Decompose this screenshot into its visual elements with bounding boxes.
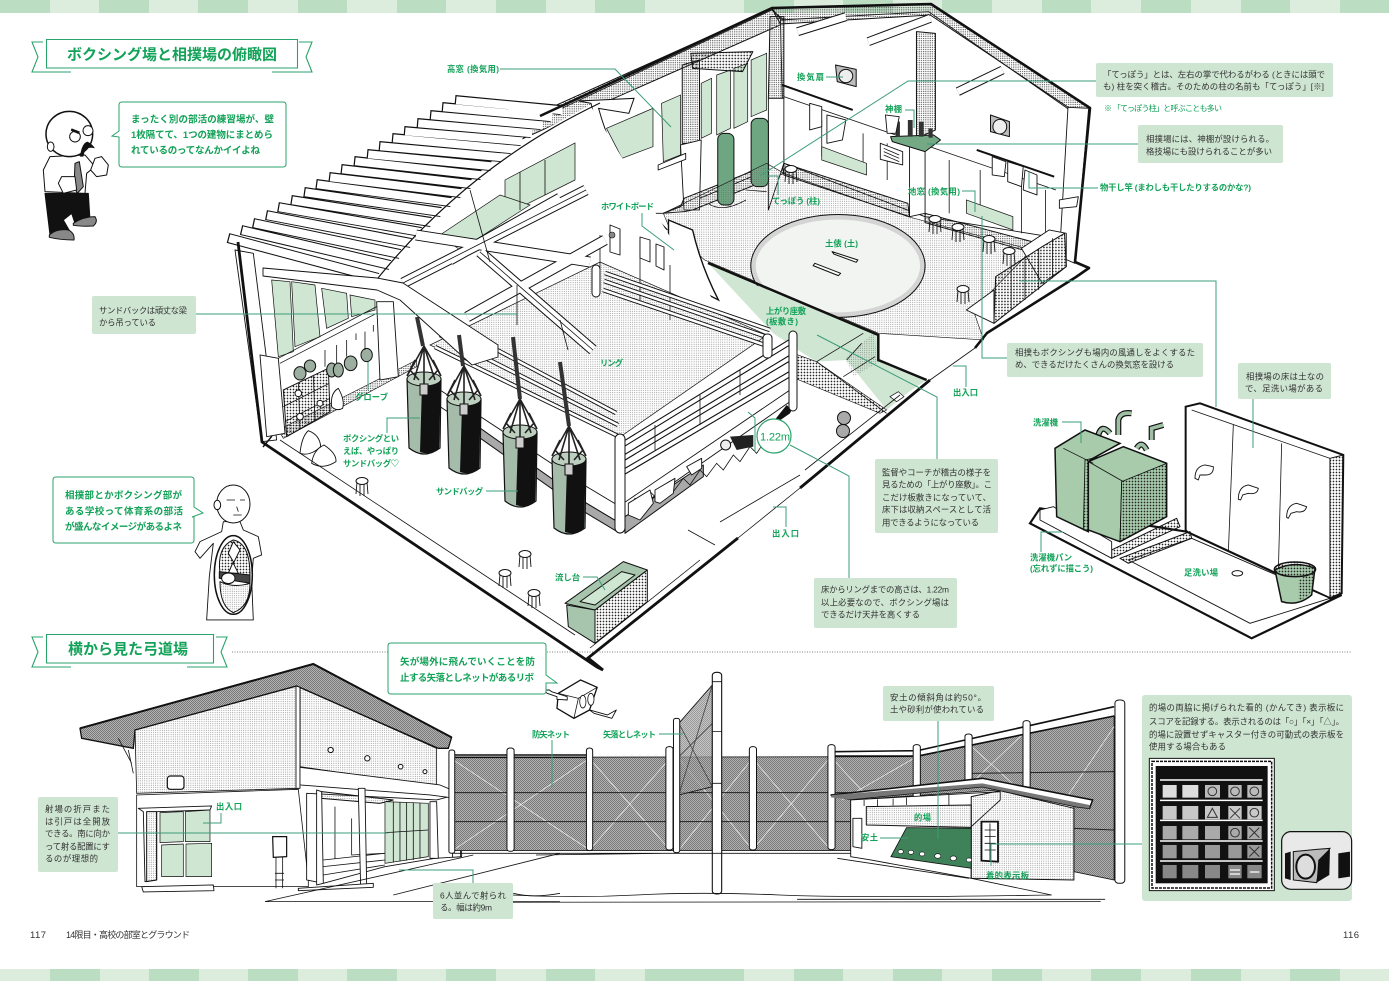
illustration: sumo room [508, 4, 1090, 340]
ring front ropes [622, 342, 790, 473]
top colour band [0, 0, 1389, 13]
safety drop net [673, 672, 722, 894]
speech bubble: torso: 相撲部とかボクシング部が [65, 490, 182, 502]
note: azuchi: 安土の傾斜角は約50°。 [890, 692, 986, 702]
note: shooting hall doors: 射場の折戸また [45, 804, 110, 814]
arrow net fence and posts [440, 672, 1125, 902]
green labels: 足洗い場 [1184, 568, 1219, 578]
green labels: グローブ [355, 392, 389, 402]
sports bags [300, 388, 343, 466]
title: bird's-eye section heading: ボクシング場と相撲場の俯瞰図 [67, 46, 277, 64]
note: ring height: 床からリングまでの高さは、1.22m [821, 584, 949, 594]
illustration: pergola roof slats [228, 100, 600, 278]
ring apron [440, 390, 792, 533]
note: ventilation: 相撲もボクシングも場内の風通しをよくするた [1015, 348, 1195, 358]
posts [449, 700, 1125, 883]
speech bubble: robot: 止する矢落としネットがあるリボ [400, 672, 534, 684]
ring corner posts [592, 265, 797, 533]
note: kamidana [1138, 125, 1283, 163]
panel: scoreboard note: スコアを記録する。表示されるのは「○」「×」「△」。 [1149, 716, 1344, 726]
stools in boxing room [356, 478, 540, 608]
speech bubble: torso [53, 477, 203, 543]
lead lines [118, 69, 1253, 883]
note: raised platform: こだけ板敷きになっていて、 [882, 492, 991, 502]
green labels: 出入口 [216, 802, 242, 812]
ventilation fans [836, 65, 1009, 137]
green labels: 地窓 (換気用) [908, 186, 960, 196]
green labels: ホワイトボード [601, 202, 654, 212]
note: ring height: できるだけ天井を高くする [821, 610, 920, 620]
note: kamidana: 格技場にも設けられることが多い [1146, 146, 1272, 156]
bucket [1274, 562, 1316, 603]
footwash and washing machine illustration [1030, 403, 1343, 638]
entrance door [138, 806, 214, 892]
note: teppo: 「てっぽう」とは、左右の掌で代わるがわる (ときには頭で [1103, 70, 1325, 80]
note: foot wash: 相撲場の床は土なの [1246, 372, 1324, 382]
green labels: 神棚 [885, 104, 902, 114]
note: azuchi [883, 686, 994, 721]
note: raised platform: 用できるようになっている [882, 518, 979, 528]
rear window wall [508, 8, 784, 213]
panel: scoreboard note [1142, 695, 1352, 901]
note: teppo: も) 柱を突く稽古。そのための柱の名前も「てっぽう」[※] [1103, 82, 1324, 92]
section rule [232, 651, 1352, 653]
panel: scoreboard note: 的場に設置せずキャスター付きの可動式の表示板を [1149, 730, 1344, 740]
note: shooting hall doors: るのが理想的 [45, 854, 98, 864]
note: raised platform: 床下は収納スペースとして活 [882, 504, 992, 514]
sink [565, 562, 647, 643]
range ground lines [265, 853, 560, 902]
green labels [216, 64, 1251, 880]
washing machines [1055, 413, 1167, 542]
illustration: boxing room interior back wall [378, 105, 770, 440]
panel: scoreboard note: 的場の両脇に掲げられた看的 (かんてき) 表示板に [1149, 702, 1344, 712]
building outline walls [238, 4, 1090, 670]
green labels: 流し台 [555, 572, 581, 582]
green labels: リング [600, 358, 624, 368]
note: ring height [814, 578, 957, 628]
kyudo building [80, 664, 463, 892]
note: teppo [1096, 63, 1333, 97]
note: shooting hall doors [38, 797, 118, 872]
note: foot wash [1238, 363, 1331, 399]
height marker circle [748, 412, 791, 453]
sliding partition [966, 230, 1066, 323]
speech bubble: torso: ある学校って体育系の部活 [65, 506, 183, 518]
panel: scoreboard note: 使用する場合もある [1149, 742, 1226, 752]
speech bubble: man [112, 102, 286, 167]
green labels: てっぽう (柱) [772, 196, 820, 206]
ring rear ropes [435, 273, 770, 437]
note: width: 6人並んで射られ [440, 890, 507, 900]
kamidana shrine shelf [885, 115, 941, 152]
right end pillar [1059, 107, 1089, 263]
note: shooting hall doors: は引戸は全開放 [45, 816, 111, 826]
illustration: roof trusses [263, 190, 605, 365]
green labels: ※ 「てっぽう柱」と呼ぶことも多い [1104, 103, 1222, 113]
target building [831, 778, 1093, 895]
partition cut wedge [579, 98, 718, 300]
note: width [433, 883, 513, 919]
mailbox [273, 837, 287, 888]
torso model character [195, 485, 262, 620]
note: sandbag beam [92, 296, 196, 334]
green labels: 出入口 [772, 528, 799, 538]
footer page numbers and running head: 14限目・高校の部室とグラウンド [66, 929, 190, 940]
title: kyudo section heading: 横から見た弓道場 [68, 641, 188, 658]
wall with faucets [1186, 403, 1343, 598]
illustration: boxing ring [430, 262, 797, 533]
green labels: 洗濯機 [1033, 418, 1059, 428]
speech bubble: man: れているのってなんかイイよね [131, 146, 260, 156]
wall pillars [235, 250, 398, 442]
laundry and drying pole [782, 85, 1054, 195]
green labels: 換気扇 [797, 72, 824, 82]
green labels: 安土 [861, 832, 878, 842]
height marker circle: 1.22m [760, 432, 790, 444]
scoreboard [1149, 758, 1274, 891]
note: shooting hall doors: できる。南に向か [45, 828, 111, 838]
note: foot wash: で、足洗い場がある [1245, 384, 1323, 394]
footer page numbers and running head: 116 [1343, 930, 1359, 941]
green labels: 洗濯機パン [1030, 552, 1072, 562]
note: kamidana: 相撲場には、神棚が設けられる。 [1146, 134, 1274, 144]
note: ventilation [1007, 343, 1203, 377]
green labels: 着的表示板 [986, 870, 1030, 880]
note: ventilation: め、できるだけたくさんの換気窓を設ける [1015, 360, 1174, 370]
green labels: ボクシングとい [343, 434, 399, 444]
robot character [544, 680, 616, 718]
green labels: (忘れずに描こう) [1030, 564, 1093, 574]
dohyo ring [754, 217, 922, 315]
green labels: (板敷き) [766, 316, 798, 326]
speech bubble: man: まったく別の部活の練習場が、壁 [131, 114, 274, 126]
cubby shelf [283, 368, 330, 437]
green labels: 高窓 (換気用) [447, 64, 499, 74]
shooting hall [298, 767, 463, 891]
roof [80, 664, 452, 788]
bottom colour band [0, 969, 1389, 981]
punching pole: teppo [708, 118, 768, 208]
green labels: 上がり座敷 [766, 306, 807, 316]
raised tatami platform [708, 263, 927, 413]
wall windows [272, 280, 375, 357]
speech bubble: robot: 矢が場外に飛んでいくことを防 [400, 656, 535, 668]
title: bird's-eye section heading [32, 40, 312, 72]
note: azuchi: 土や砂利が使われている [890, 704, 984, 714]
illustration: boxing side wall [235, 250, 420, 466]
green labels: サンドバッグ [436, 486, 484, 496]
note: raised platform: 監督やコーチが稽古の様子を [882, 468, 991, 478]
footer page numbers and running head: 117 [30, 930, 46, 941]
green labels: 矢落としネット [603, 730, 656, 740]
gable back wall [768, 4, 1090, 250]
sumo floor [663, 163, 1032, 340]
title: kyudo section heading [32, 634, 227, 667]
scoreboard detail inset [1282, 832, 1352, 889]
note: ring height: 以上必要なので、ボクシング場は [821, 598, 949, 608]
speech bubble: robot [388, 643, 557, 694]
green labels: 出入口 [953, 388, 978, 398]
note: raised platform [875, 459, 998, 533]
note: width: る。幅は約9m [440, 902, 492, 912]
note: raised platform: 見るための「上がり座敷」。こ [882, 480, 992, 490]
water bottle kettlebell [836, 412, 850, 438]
note: sandbag beam: サンドバックは頑丈な梁 [99, 306, 188, 316]
green labels: 的場 [914, 812, 932, 822]
note: sandbag beam: から吊っている [99, 318, 156, 328]
note: shooting hall doors: って射る配置にす [45, 842, 110, 852]
green labels: サンドバッグ♡ [343, 458, 399, 468]
bald man character [43, 111, 108, 240]
sandbags [407, 317, 586, 534]
green labels: 物干し竿 (まわしも干したりするのかな?) [1100, 182, 1251, 192]
footer page numbers and running head [30, 929, 1359, 941]
stools in sumo room [785, 166, 1015, 304]
green labels: 土俵 (土) [825, 238, 858, 248]
floor slab [1030, 507, 1342, 638]
green labels: 防矢ネット [532, 730, 570, 740]
green labels: えば、やっぱり [343, 446, 399, 456]
speech bubble: torso: が盛んなイメージがあるよネ [65, 521, 182, 533]
boxing gloves [294, 325, 373, 380]
speech bubble: man: 1枚隔てて、1つの建物にまとめら [131, 129, 273, 141]
